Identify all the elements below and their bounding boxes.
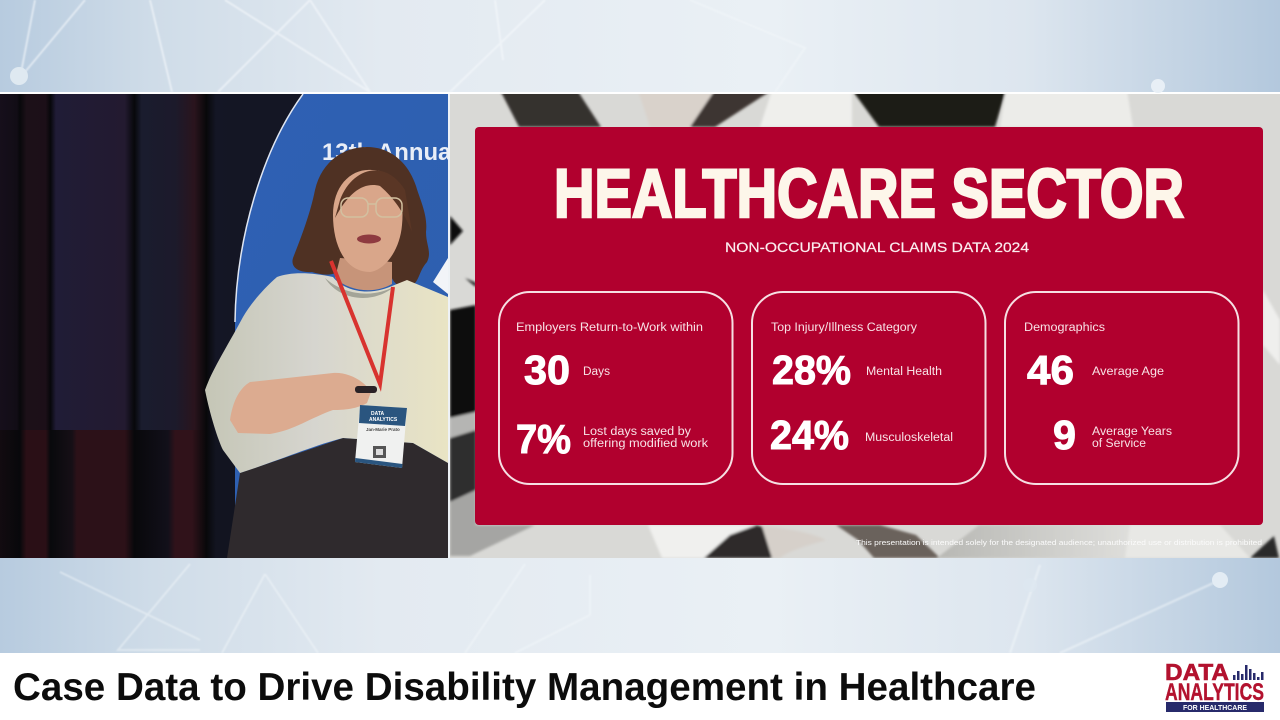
stat: 46 average age: Average Age <box>1092 366 1164 378</box>
stat: 7% lost days saved: Lost days saved by <box>583 426 691 438</box>
stat: 9 average years of service <box>1054 420 1172 450</box>
mouth <box>357 234 381 244</box>
name badge: ANALYTICS <box>369 417 398 423</box>
stat: 24% musculoskeletal: 24% <box>770 412 849 458</box>
stat: 46 average age: 46 <box>1027 347 1074 393</box>
stat: 24% musculoskeletal <box>770 420 952 450</box>
speaker <box>205 147 448 558</box>
blue event banner <box>234 94 448 506</box>
name badge <box>355 405 407 468</box>
card: top injury or illness category <box>752 292 986 484</box>
stat: 7% lost days saved <box>517 424 708 454</box>
background: top network band <box>0 0 1280 93</box>
card: demographics <box>1005 292 1238 484</box>
neck <box>335 258 392 290</box>
logo: data analytics for healthcare <box>1165 659 1264 712</box>
forearm <box>230 373 371 434</box>
stat: 7% lost days saved: offering modified work <box>583 438 708 450</box>
background: bottom network band <box>0 558 1280 653</box>
stat: 7% lost days saved: 7% <box>516 416 571 462</box>
logo: data analytics for healthcare: FOR HEALTHCARE <box>1183 703 1247 712</box>
card: return to work: Employers Return-to-Work within <box>516 322 703 334</box>
stat: 24% musculoskeletal: Musculoskeletal <box>865 432 953 444</box>
footer title: Case Data to Drive Disability Management in Healthcare <box>13 666 1036 709</box>
stat: 46 average age <box>1027 355 1164 385</box>
clicker <box>355 386 377 393</box>
stat: 28% mental health: 28% <box>772 347 851 393</box>
logo: data analytics for healthcare: DATA <box>1165 659 1229 685</box>
slide subheading: NON-OCCUPATIONAL CLAIMS DATA 2024 <box>725 239 1029 255</box>
stage curtain <box>0 94 214 558</box>
name badge: Jan-Marie Prato <box>366 427 400 432</box>
collar shadow <box>325 278 395 298</box>
stat: 28% mental health: Mental Health <box>866 366 942 378</box>
stat: 30 days: Days <box>583 366 610 378</box>
trousers <box>227 438 448 558</box>
shirt <box>205 273 448 473</box>
logo bar chart <box>1233 665 1264 680</box>
stat: 30 days <box>524 355 610 385</box>
fringe <box>335 170 412 232</box>
card: demographics: Demographics <box>1024 322 1105 334</box>
panel: slide <box>450 90 1280 558</box>
stat: 30 days: 30 <box>524 347 570 393</box>
glasses <box>341 198 402 217</box>
face <box>333 170 403 272</box>
panel: speaker video <box>0 94 458 558</box>
card: return to work <box>499 292 732 484</box>
slide photo background <box>450 90 1280 558</box>
card: top injury or illness category: Top Injury/Illness Category <box>771 322 917 334</box>
blue event banner: 13th Annual <box>322 139 458 166</box>
stat: 9 average years of service: of Service <box>1092 438 1146 450</box>
hair back <box>292 147 429 288</box>
name badge: DATA <box>371 411 385 417</box>
lanyard <box>331 261 393 384</box>
footer bar <box>0 653 1280 720</box>
stat: 9 average years of service: Average Years <box>1092 426 1172 438</box>
stat: 9 average years of service: 9 <box>1053 412 1076 458</box>
footnote: This presentation is intended solely for the designated audience; unauthorized use or distribution is prohibited <box>856 538 1262 547</box>
red content panel <box>475 127 1263 525</box>
stat: 28% mental health <box>772 355 942 385</box>
divider between video and slide <box>448 94 450 558</box>
